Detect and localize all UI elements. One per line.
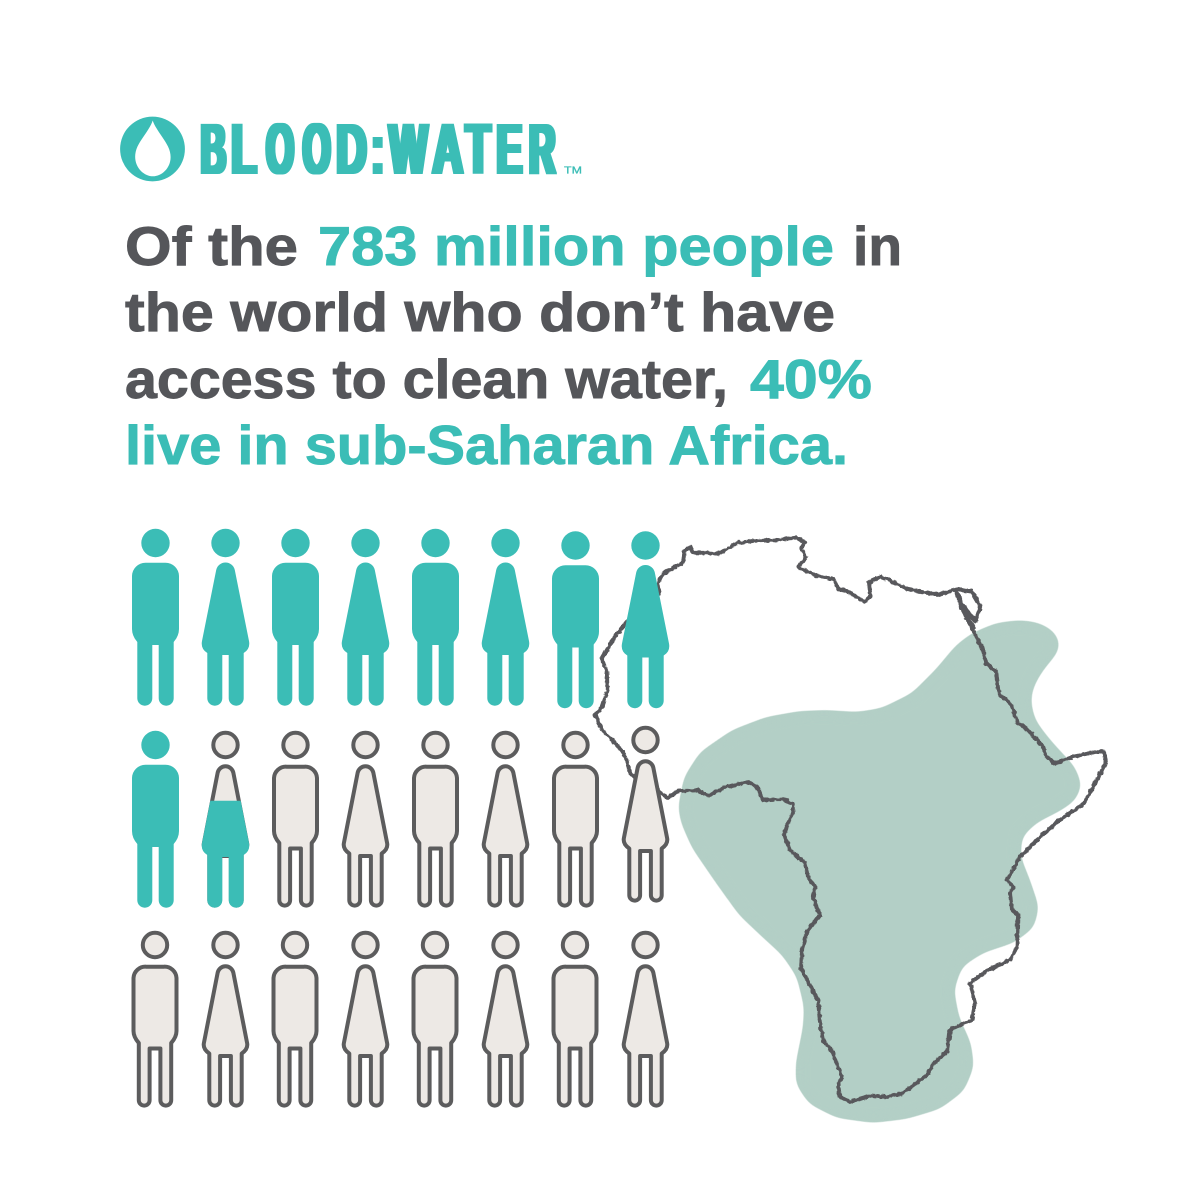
person 1 <box>132 529 179 706</box>
person 16 <box>624 728 667 901</box>
logo wordmark: O <box>303 109 331 189</box>
person 24 <box>624 933 667 1106</box>
headline: access to clean water, <box>125 348 728 410</box>
person 18 <box>204 933 247 1106</box>
map: continent outline <box>595 538 1106 1102</box>
person 12 <box>344 733 387 906</box>
person 17 <box>134 933 176 1106</box>
logo wordmark: R <box>529 109 555 189</box>
logo wordmark: : <box>372 109 384 189</box>
person 20 <box>344 933 387 1106</box>
logo: Blood:Water <box>120 109 582 190</box>
person 7 <box>552 531 599 708</box>
map: sub-Saharan shaded region <box>678 620 1082 1123</box>
logo wordmark: O <box>266 109 294 189</box>
person 13 <box>414 733 457 906</box>
person 21 <box>414 933 456 1106</box>
people row 1: filled <box>132 529 669 708</box>
logo wordmark: D <box>336 110 367 189</box>
icon: water drop in circle <box>120 117 185 181</box>
logo wordmark: W <box>389 111 428 189</box>
person 15 <box>554 733 597 906</box>
person 5 <box>412 529 459 706</box>
logo wordmark: A <box>433 110 463 189</box>
logo wordmark: T <box>466 111 491 189</box>
person 6 <box>482 529 529 706</box>
logo wordmark <box>201 109 555 190</box>
headline: 40% <box>750 348 872 410</box>
person 22 <box>484 933 527 1106</box>
person 3 <box>272 529 319 706</box>
trademark: TM <box>564 166 582 176</box>
headline: in <box>853 215 902 277</box>
headline: 783 million people <box>318 215 834 277</box>
person 8 <box>622 531 669 708</box>
headline: live in sub-Saharan Africa. <box>125 414 848 476</box>
logo wordmark: B <box>201 109 226 189</box>
logo wordmark: E <box>497 110 522 190</box>
person 4 <box>342 529 389 706</box>
headline: the world who don’t have <box>125 281 835 343</box>
headline <box>125 215 902 476</box>
people row 3: outlined <box>134 933 667 1106</box>
people row 2: filled and outlined <box>132 728 667 908</box>
person 11 <box>274 733 317 906</box>
map: Africa <box>595 538 1106 1123</box>
logo wordmark: L <box>231 110 257 189</box>
person 2 <box>202 529 249 706</box>
headline: Of the <box>125 215 298 277</box>
person 19 <box>274 933 316 1106</box>
person 9 filled <box>132 731 179 908</box>
person 10 partially filled <box>202 733 249 908</box>
person 14 <box>484 733 527 906</box>
person 23 <box>554 933 596 1106</box>
